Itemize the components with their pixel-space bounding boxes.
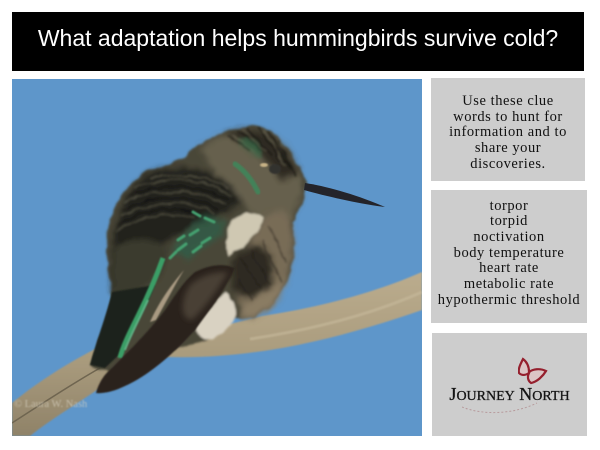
icon: butterfly — [518, 357, 548, 384]
panel: Journey North logo — [432, 333, 587, 436]
breast streaks — [238, 225, 286, 300]
dark primaries — [90, 285, 155, 368]
iridescent wing edge — [120, 258, 163, 358]
clue word list: torpid — [490, 213, 528, 229]
clue word list: heart rate — [479, 260, 539, 276]
folded wing — [96, 265, 235, 393]
clue word list: noctivation — [473, 229, 545, 245]
bill — [304, 183, 385, 207]
clue word list: body temperature — [454, 245, 564, 261]
photo credit: © Laura W. Nash — [14, 399, 88, 410]
dark flank — [232, 247, 273, 298]
body — [90, 126, 307, 372]
instruction text: words to hunt for — [453, 109, 563, 125]
clue word list: torpor — [490, 198, 528, 214]
title banner — [12, 12, 584, 71]
green wash — [172, 215, 226, 262]
decorative flight trail — [462, 402, 538, 414]
clue word list — [438, 198, 580, 308]
white chest patch — [226, 213, 262, 256]
title text: What adaptation helps hummingbirds survive cold? — [38, 25, 558, 51]
instruction text: discoveries. — [470, 156, 546, 172]
panel: instructions — [431, 78, 585, 181]
photo: hummingbird on perch — [12, 79, 422, 436]
clue word list: metabolic rate — [464, 276, 554, 292]
sky background — [12, 79, 422, 436]
instruction text: share your — [475, 140, 541, 156]
instruction text: information and to — [449, 124, 567, 140]
back shading — [112, 168, 248, 290]
perch — [12, 272, 422, 436]
lower breast — [240, 272, 288, 318]
logo wordmark: JOURNEY NORTH — [449, 384, 570, 404]
lower back — [112, 239, 170, 305]
green feathers — [170, 212, 214, 258]
breast — [237, 211, 293, 318]
white belly patch — [196, 292, 235, 339]
green gorget stripe — [235, 164, 258, 192]
instruction text — [449, 93, 567, 172]
eye — [269, 164, 281, 174]
pale wing edge — [150, 270, 184, 322]
feather streaks — [116, 175, 232, 232]
clue word list: hypothermic threshold — [438, 292, 580, 308]
instruction text: Use these clue — [462, 93, 554, 109]
panel: clue words — [431, 190, 587, 323]
crown streaks — [228, 128, 296, 176]
wing highlight — [183, 272, 228, 320]
eyebrow spot — [260, 163, 268, 167]
crown — [225, 130, 299, 180]
hummingbird — [90, 126, 385, 393]
head and neck — [200, 131, 303, 232]
